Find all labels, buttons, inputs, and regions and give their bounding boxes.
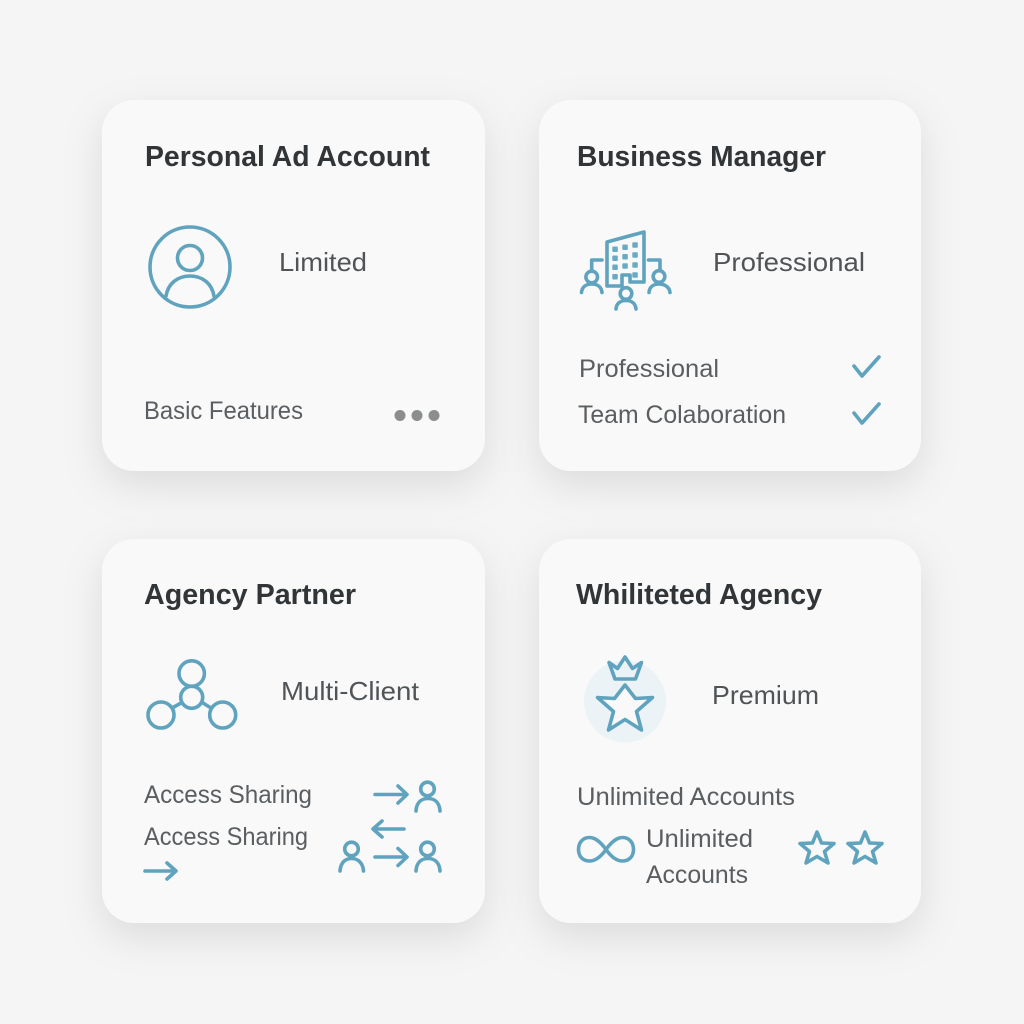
icon: check <box>854 357 879 376</box>
heading: whiliteted agency: Whiliteted Agency <box>576 579 822 611</box>
icon: star with crown <box>584 657 666 742</box>
icon: connected nodes <box>148 661 236 728</box>
heading: business manager: Business Manager <box>577 141 826 173</box>
feature: team collaboration: Team Colaboration <box>578 401 786 429</box>
icon: infinity <box>578 838 634 861</box>
icon: sharing arrows and people <box>340 782 440 871</box>
icon: small arrow <box>145 863 176 879</box>
icon: check <box>854 404 879 423</box>
feature: unlimited accounts, two lines <box>646 825 753 889</box>
heading: personal ad account: Personal Ad Account <box>145 141 430 173</box>
feature: professional: Professional <box>579 355 719 383</box>
icon: two stars <box>800 832 882 863</box>
label: premium: Premium <box>712 680 819 710</box>
panel: business manager <box>539 100 921 471</box>
feature: unlimited accounts, two lines: Accounts <box>646 861 748 889</box>
feature: unlimited accounts, two lines: Unlimited <box>646 825 753 853</box>
label: limited: Limited <box>279 247 367 277</box>
text: basic features: Basic Features <box>144 397 303 425</box>
feature: unlimited accounts: Unlimited Accounts <box>577 783 795 811</box>
icon: three dots <box>394 410 440 421</box>
panel: personal ad account <box>102 100 485 471</box>
icon: user in circle <box>150 227 230 307</box>
label: professional: Professional <box>713 247 865 277</box>
panel: whiliteted agency <box>539 539 921 923</box>
label: multi-client: Multi-Client <box>281 676 420 706</box>
panel: agency partner <box>102 539 485 923</box>
feature: access sharing: Access Sharing <box>144 823 308 851</box>
heading: agency partner: Agency Partner <box>144 579 356 611</box>
feature: access sharing: Access Sharing <box>144 781 312 809</box>
icon: office building with team <box>582 232 670 309</box>
